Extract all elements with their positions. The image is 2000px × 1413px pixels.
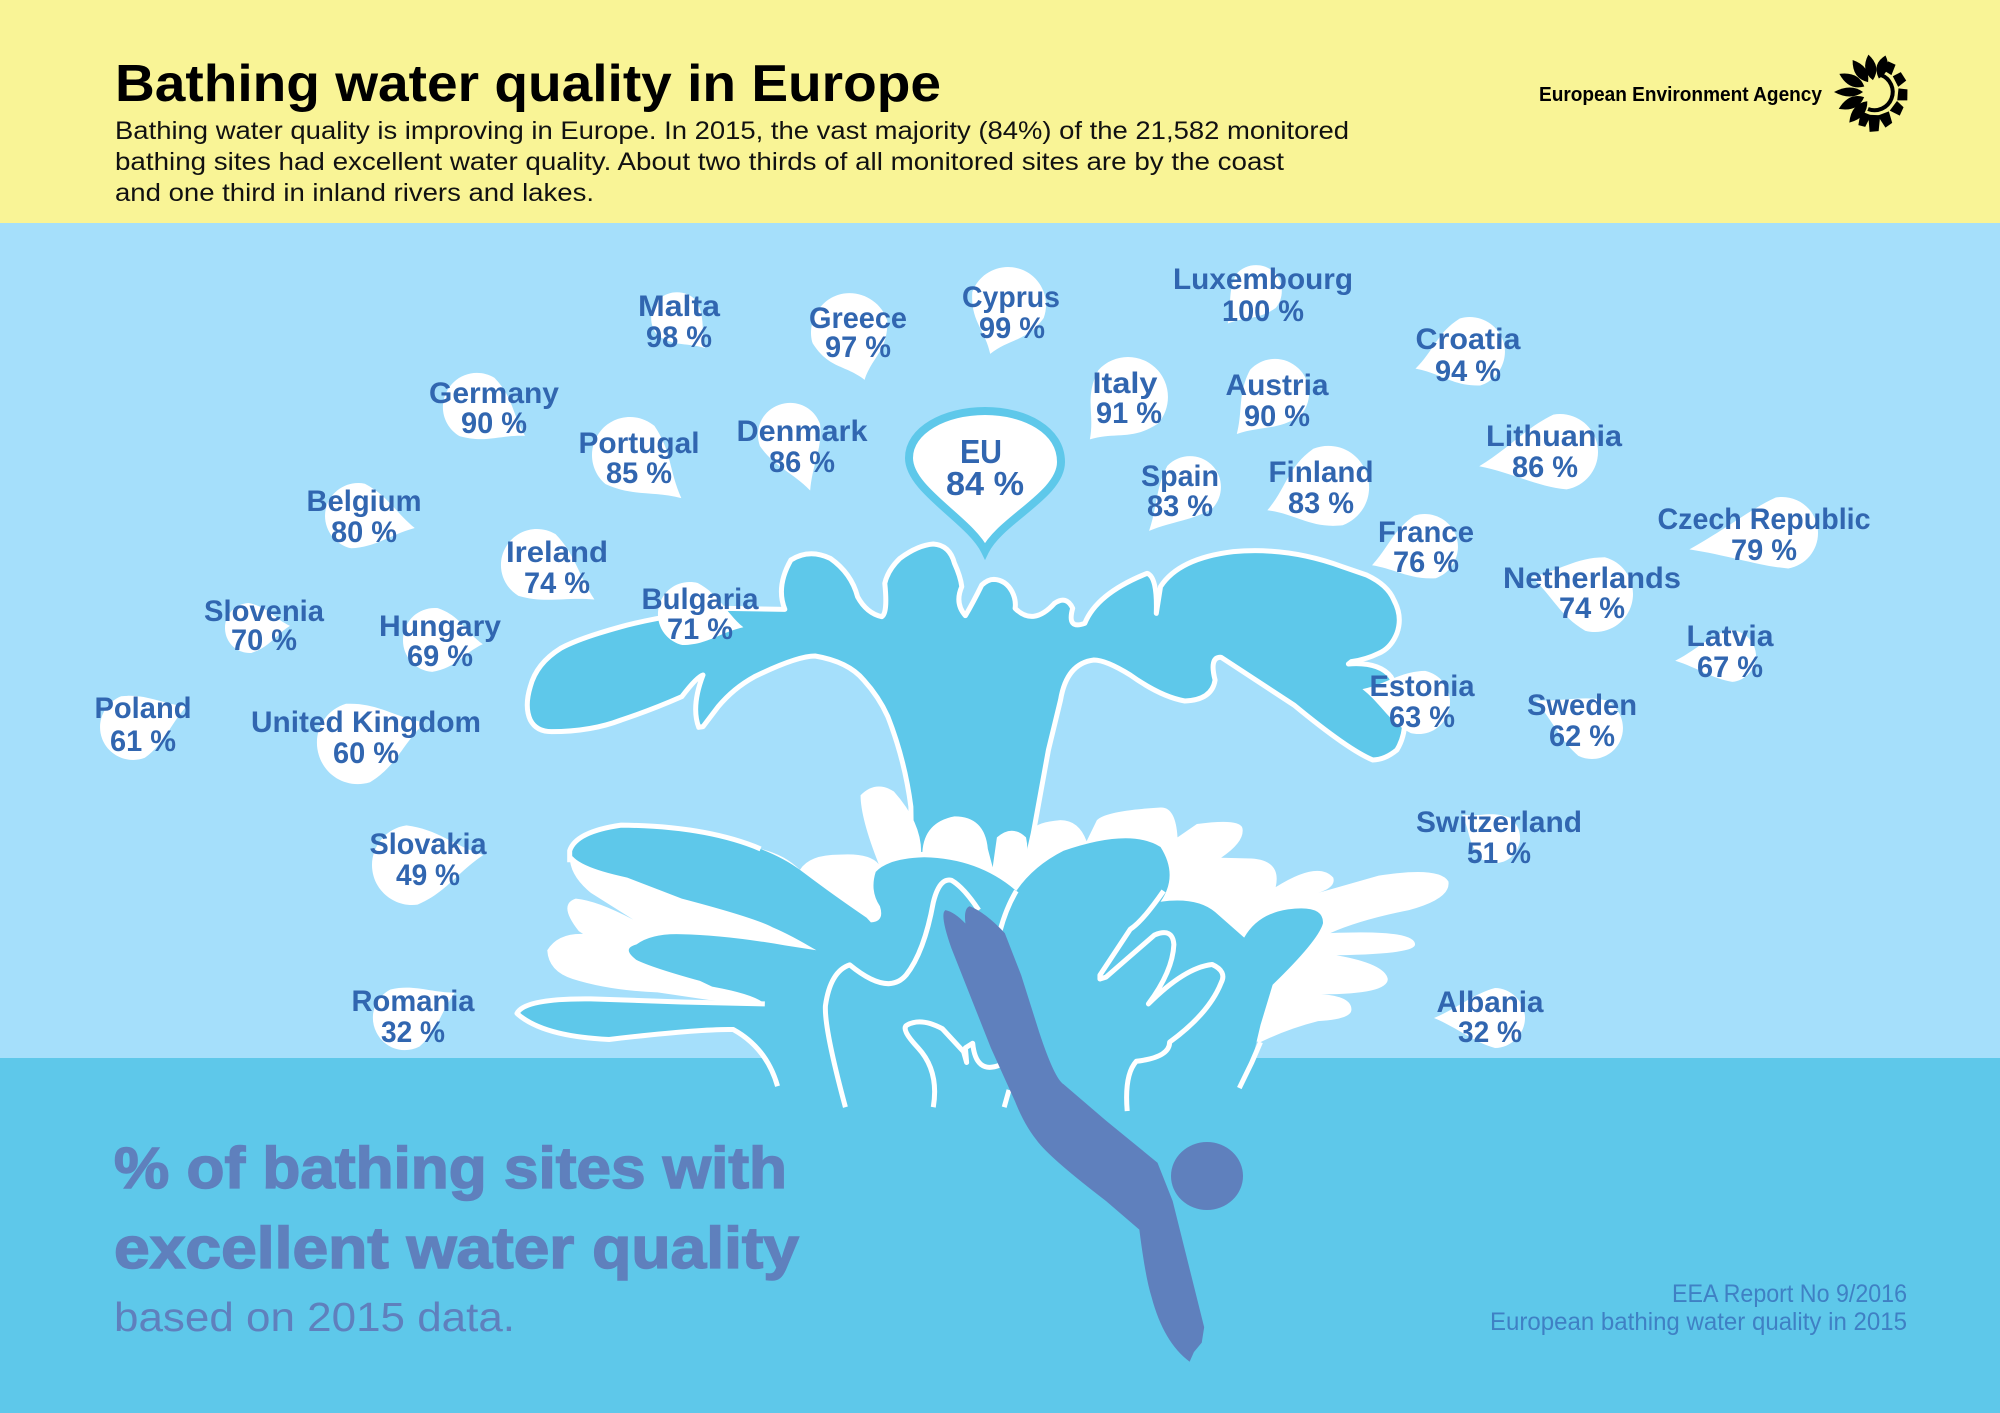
drop: Slovakia <box>367 815 489 910</box>
drop: Lithuania: 86 % <box>1512 451 1578 484</box>
drop: Cyprus: 99 % <box>979 312 1045 345</box>
drop: Austria: Austria <box>1226 369 1329 402</box>
drop: Luxembourg: 100 % <box>1222 295 1304 328</box>
splash <box>517 787 1449 1362</box>
drop: Malta <box>638 281 724 366</box>
drop: Cyprus: Cyprus <box>962 281 1060 314</box>
legend heading: excellent water quality <box>114 1216 799 1281</box>
drop: Lithuania <box>1473 408 1622 504</box>
splash: blue water mass <box>517 825 1323 1124</box>
drop: Finland: Finland <box>1268 456 1374 489</box>
drop: Luxembourg: Luxembourg <box>1173 263 1353 296</box>
drop: Ireland <box>488 516 613 630</box>
EU drop shape <box>909 411 1061 551</box>
drop: Malta: 98 % <box>646 321 712 354</box>
drop: Greece <box>801 283 907 391</box>
drop: Denmark: 86 % <box>769 446 835 479</box>
legend heading: % of bathing sites with <box>114 1136 787 1201</box>
drop: Croatia: 94 % <box>1435 355 1501 388</box>
drop: Poland <box>90 676 198 770</box>
source note: EEA Report No 9/2016 <box>1672 1280 1907 1308</box>
drop: Czech Republic: Czech Republic <box>1658 503 1870 536</box>
drop: Belgium: Belgium <box>306 485 422 518</box>
drop: Denmark <box>736 394 868 501</box>
source note: European bathing water quality in 2015 <box>1490 1308 1907 1336</box>
drop: Estonia: Estonia <box>1370 670 1475 703</box>
drop: Portugal <box>576 401 706 527</box>
drop: Finland: 83 % <box>1288 487 1354 520</box>
drop: Switzerland <box>1416 795 1582 873</box>
drop: Denmark: Denmark <box>736 415 868 448</box>
drop: France: 76 % <box>1393 546 1459 579</box>
drop: Albania: Albania <box>1436 986 1544 1019</box>
icon: diver <box>943 906 1204 1362</box>
drop: Spain: Spain <box>1141 460 1219 493</box>
drop: Finland <box>1253 434 1381 549</box>
background: sky <box>0 0 2000 1058</box>
title: Bathing water quality in Europe <box>115 55 941 113</box>
background: water <box>0 1058 2000 1413</box>
drop: United Kingdom <box>251 683 481 794</box>
drop: Austria <box>1212 345 1329 457</box>
drop: Slovenia: 70 % <box>231 624 297 657</box>
drop: Italy: 91 % <box>1096 397 1162 430</box>
drop: Bulgaria: 71 % <box>667 613 733 646</box>
drop: Sweden: 62 % <box>1549 720 1615 753</box>
icon: diver head <box>1171 1142 1243 1210</box>
drop: Portugal: Portugal <box>578 427 700 460</box>
drop: Slovenia: Slovenia <box>204 595 324 628</box>
drop: Austria: 90 % <box>1244 400 1310 433</box>
source note <box>1490 1280 1907 1336</box>
drop: Albania: 32 % <box>1458 1016 1522 1049</box>
drop: Sweden: Sweden <box>1527 689 1637 722</box>
intro text: bathing sites had excellent water quality. About two thirds of all monitored sites are by the coast <box>115 148 1284 176</box>
drop: Bulgaria: Bulgaria <box>642 583 759 616</box>
intro text: Bathing water quality is improving in Europe. In 2015, the vast majority (84%) of the 21,582 monitored <box>115 117 1349 145</box>
EU value: 84 % <box>946 465 1024 502</box>
drop: Netherlands <box>1503 540 1681 641</box>
drop: Croatia <box>1405 308 1521 402</box>
drop: Slovenia <box>204 595 324 657</box>
drop: Slovakia: 49 % <box>396 859 460 892</box>
drop: France <box>1361 505 1474 596</box>
drop: Lithuania: Lithuania <box>1486 420 1622 453</box>
fountain column and arms <box>527 544 1405 887</box>
drop: Germany: Germany <box>429 377 559 410</box>
drop: Spain <box>1126 443 1234 552</box>
drop: Sweden <box>1522 673 1637 769</box>
drop: Greece: 97 % <box>825 331 891 364</box>
drop: Romania: 32 % <box>381 1016 445 1049</box>
drop: Netherlands: 74 % <box>1559 592 1625 625</box>
drop: Germany <box>429 360 559 465</box>
drop: France: France <box>1378 516 1474 549</box>
drop: Hungary <box>379 605 501 676</box>
logo wordmark: European Environment Agency <box>1539 83 1823 106</box>
drop: Hungary: Hungary <box>379 610 501 643</box>
splash: white spray <box>547 787 1449 1042</box>
logo: European Environment Agency <box>1539 54 1908 132</box>
drop: Estonia: 63 % <box>1389 701 1455 734</box>
legend heading <box>114 1136 799 1281</box>
drop: Ireland: Ireland <box>506 536 608 569</box>
drop: Latvia: 67 % <box>1697 651 1763 684</box>
drop: Cyprus <box>955 256 1060 367</box>
drop: Albania <box>1434 986 1544 1049</box>
drop: United Kingdom: United Kingdom <box>251 706 481 739</box>
intro text: and one third in inland rivers and lakes. <box>115 179 594 207</box>
EU label: EU <box>960 433 1002 470</box>
drop: Romania: Romania <box>352 985 475 1018</box>
splash: white contour lines <box>517 825 1261 1111</box>
drop: Latvia <box>1673 620 1774 687</box>
drop: Greece: Greece <box>809 302 907 335</box>
drop: Poland: Poland <box>94 692 192 725</box>
drop: Italy: Italy <box>1092 367 1158 400</box>
intro text <box>115 117 1349 207</box>
drop: Romania <box>352 964 475 1061</box>
drop: Hungary: 69 % <box>407 640 473 673</box>
drop: Poland: 61 % <box>110 725 176 758</box>
drop: Estonia <box>1355 658 1475 740</box>
drop: Portugal: 85 % <box>606 457 672 490</box>
header band <box>0 0 2000 223</box>
drop: Netherlands: Netherlands <box>1503 562 1681 595</box>
EU drop <box>909 411 1061 551</box>
drop: Ireland: 74 % <box>524 567 590 600</box>
drop: Switzerland: 51 % <box>1467 837 1531 870</box>
drop: Czech Republic <box>1658 491 1870 585</box>
drop: Switzerland: Switzerland <box>1416 806 1582 839</box>
drop: Bulgaria <box>642 575 759 658</box>
drop: Czech Republic: 79 % <box>1731 534 1797 567</box>
drop: Belgium: 80 % <box>331 516 397 549</box>
legend subheading: based on 2015 data. <box>114 1294 515 1340</box>
drop: Malta: Malta <box>638 290 720 323</box>
icon: EEA sun <box>1834 54 1908 132</box>
drop: Latvia: Latvia <box>1686 620 1774 653</box>
drop: Luxembourg <box>1173 254 1353 341</box>
drop: Germany: 90 % <box>461 407 527 440</box>
drop: Slovakia: Slovakia <box>370 828 487 861</box>
drop: Italy <box>1060 341 1184 466</box>
drop: United Kingdom: 60 % <box>333 737 399 770</box>
drop: Croatia: Croatia <box>1416 323 1521 356</box>
drop: Belgium <box>306 477 422 560</box>
drop: Spain: 83 % <box>1147 490 1213 523</box>
